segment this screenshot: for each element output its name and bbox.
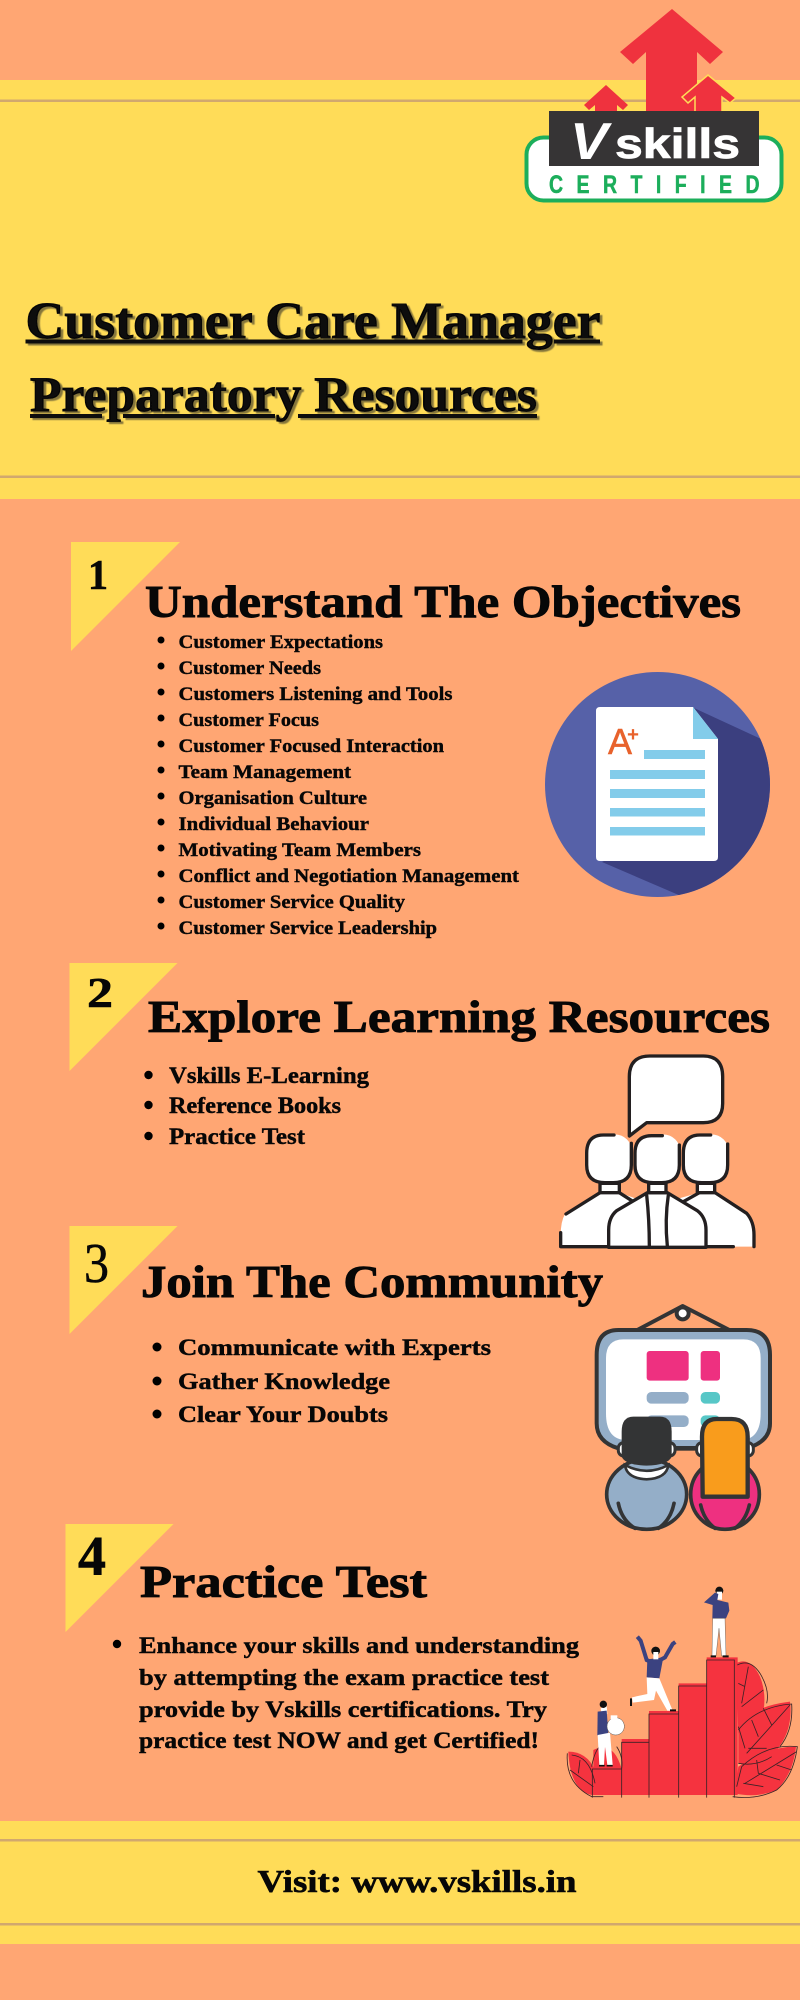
footer link text: Visit: www.vskills.in	[258, 1863, 577, 1899]
panel: step 1 understand the objectives	[71, 542, 800, 939]
heading: practice test: Practice Test	[140, 1557, 427, 1607]
list: objectives: Customer Focus	[178, 710, 319, 731]
header band	[0, 80, 800, 499]
list: objectives: Team Management	[178, 762, 352, 783]
text block: practice test description: provide by Vskills certifications. Try	[139, 1697, 548, 1722]
text block: practice test description	[113, 1633, 580, 1753]
list: community benefits: Communicate with Experts	[178, 1335, 491, 1360]
icon: two people at a board	[597, 1306, 770, 1529]
step 3 number badge: 3	[84, 1233, 109, 1295]
list: objectives: Customer Focused Interaction	[178, 736, 444, 757]
text block: practice test description: practice test NOW and get Certified!	[139, 1728, 539, 1753]
list: objectives: Individual Behaviour	[178, 814, 370, 835]
list: community benefits: Clear Your Doubts	[178, 1402, 388, 1427]
step 4 number badge	[66, 1524, 174, 1632]
icon: people climbing red stairs	[567, 1587, 797, 1798]
list: objectives: Customer Service Leadership	[178, 918, 437, 939]
list: objectives: Motivating Team Members	[178, 840, 421, 861]
list: learning resources: Vskills E-Learning	[169, 1063, 370, 1088]
step 4 number badge: 4	[78, 1526, 106, 1588]
step 3 number badge	[70, 1226, 178, 1334]
step 2 number badge: 2	[87, 971, 113, 1017]
panel: step 3 join the community	[70, 1226, 770, 1529]
list: objectives: Customer Service Quality	[178, 892, 406, 913]
logo: Vskills Certified	[526, 9, 782, 200]
figure: person with idea sack	[597, 1701, 624, 1766]
list: objectives: Conflict and Negotiation Management	[178, 866, 520, 887]
title: Customer Care Manager	[26, 293, 600, 350]
list: learning resources	[144, 1063, 370, 1149]
logo: Vskills Certified: skills	[615, 120, 740, 167]
footer band	[0, 1821, 800, 1944]
panel: step 4 practice test	[66, 1524, 797, 1798]
list: learning resources: Reference Books	[169, 1093, 341, 1118]
title	[26, 293, 600, 422]
panel: step 2 explore learning resources	[70, 963, 770, 1247]
icon: graded document: +	[627, 724, 639, 746]
step 1 number badge	[71, 542, 180, 651]
list: objectives: Organisation Culture	[178, 788, 367, 809]
list: objectives	[158, 632, 520, 939]
list: objectives: Customer Needs	[178, 658, 321, 679]
icon: people with speech bubble	[561, 1056, 754, 1247]
logo: Vskills Certified: V	[570, 113, 613, 171]
heading: explore learning resources: Explore Learning Resources	[148, 992, 770, 1042]
icon: graded document: A	[608, 721, 632, 762]
title: Preparatory Resources	[30, 366, 537, 422]
list: objectives: Customers Listening and Tools	[178, 684, 452, 705]
text block: practice test description: by attempting the exam practice test	[139, 1665, 549, 1690]
figure: person jumping with arms raised	[631, 1637, 676, 1711]
heading: understand the objectives: Understand The Objectives	[145, 577, 741, 627]
step 1 number badge: 1	[88, 553, 108, 599]
list: community benefits: Gather Knowledge	[178, 1369, 390, 1394]
logo: Vskills Certified: CERTIFIED	[549, 171, 760, 199]
text block: practice test description: Enhance your skills and understanding	[139, 1633, 580, 1658]
heading: join the community: Join The Community	[141, 1257, 604, 1307]
figure: person standing on top	[704, 1587, 729, 1656]
step 2 number badge	[70, 963, 178, 1071]
list: learning resources: Practice Test	[169, 1124, 305, 1149]
icon: graded document	[545, 672, 770, 897]
list: objectives: Customer Expectations	[178, 632, 383, 653]
list: community benefits	[152, 1335, 491, 1427]
